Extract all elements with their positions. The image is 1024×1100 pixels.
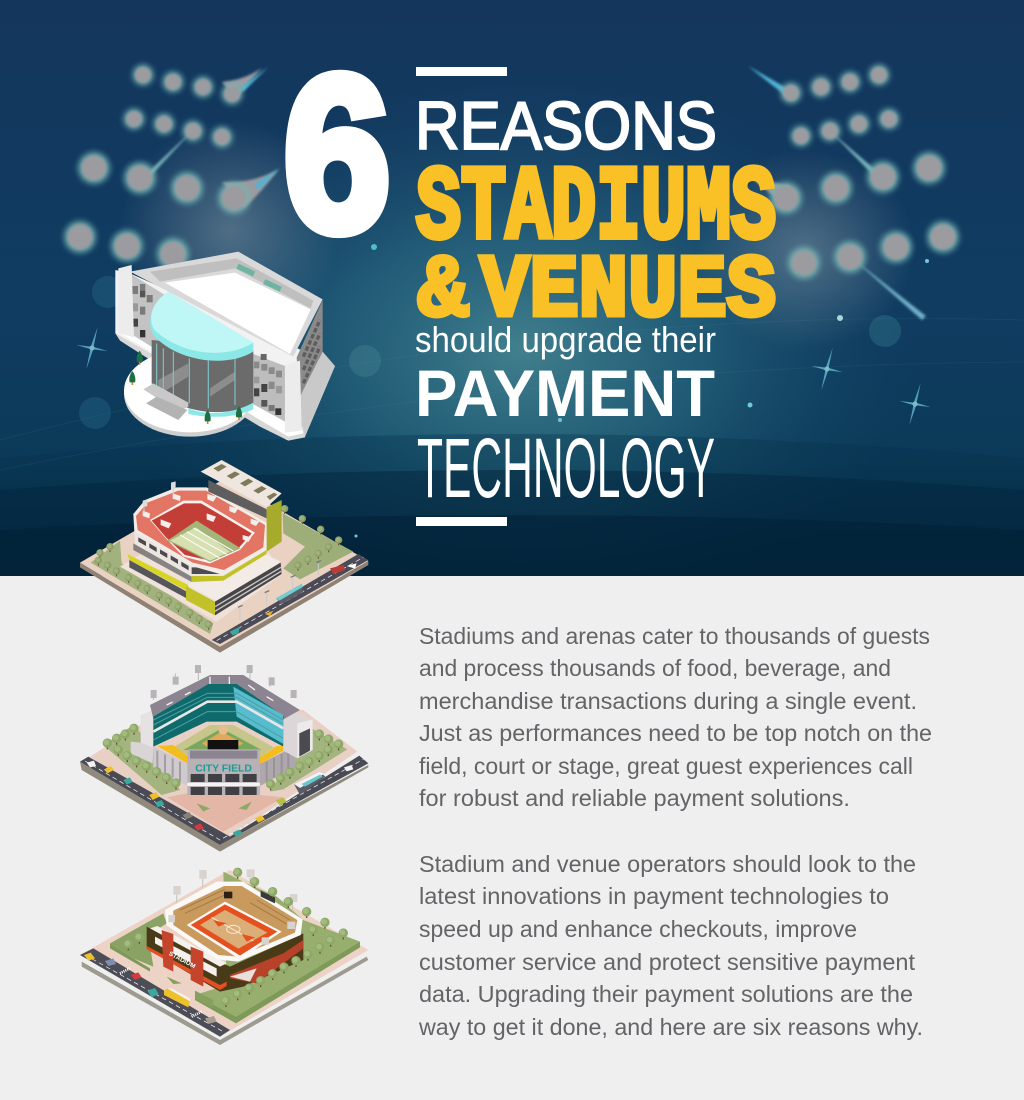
title xyxy=(284,29,776,526)
title rule: top xyxy=(416,67,507,76)
heading: technology: TECHNOLOGY xyxy=(417,421,715,515)
intro paragraph: for robust and reliable payment solutions. xyxy=(419,785,850,811)
heading: reasons: REASONS xyxy=(415,88,717,164)
numeral 6: 6 xyxy=(284,29,390,277)
illustration: City Field ballpark xyxy=(80,665,368,852)
title rule: bottom xyxy=(416,517,507,526)
intro paragraph: merchandise transactions during a single event. xyxy=(419,688,917,714)
illustration: white arena building xyxy=(115,252,335,441)
sign: Stadium: STADIUM xyxy=(167,951,196,970)
illustration: red football stadium xyxy=(80,460,368,653)
intro paragraph: Stadiums and arenas cater to thousands of guests xyxy=(419,623,930,649)
illustration: orange basketball arena xyxy=(80,868,368,1045)
intro paragraph: Just as performances need to be top notch on the xyxy=(419,720,932,746)
heading: and venues: & xyxy=(418,243,468,342)
intro paragraph: field, court or stage, great guest experiences call xyxy=(419,753,913,779)
second paragraph: customer service and protect sensitive payment xyxy=(419,949,916,975)
heading: stadiums: STADIUMS xyxy=(416,151,776,269)
second paragraph: speed up and enhance checkouts, improve xyxy=(419,916,857,942)
second paragraph xyxy=(418,851,923,1040)
heading: and venues: VENUES xyxy=(480,243,776,342)
second paragraph: latest innovations in payment technologies to xyxy=(419,883,889,909)
sign: City Field: CITY FIELD xyxy=(195,763,252,774)
header background xyxy=(0,0,1024,577)
second paragraph: data. Upgrading their payment solutions are the xyxy=(419,981,913,1007)
intro paragraph xyxy=(419,623,932,811)
second paragraph: Stadium and venue operators should look to the xyxy=(419,851,916,877)
sparkles and lens flares xyxy=(71,244,936,538)
intro paragraph: and process thousands of food, beverage, and xyxy=(419,655,891,681)
stadium floodlights: right bank xyxy=(748,64,959,320)
heading: should upgrade their: should upgrade their xyxy=(415,319,716,360)
stadium floodlights: left bank xyxy=(64,64,280,270)
heading: payment: PAYMENT xyxy=(415,356,715,430)
lower panel background xyxy=(0,576,1024,1100)
second paragraph: way to get it done, and here are six reasons why. xyxy=(418,1014,923,1040)
